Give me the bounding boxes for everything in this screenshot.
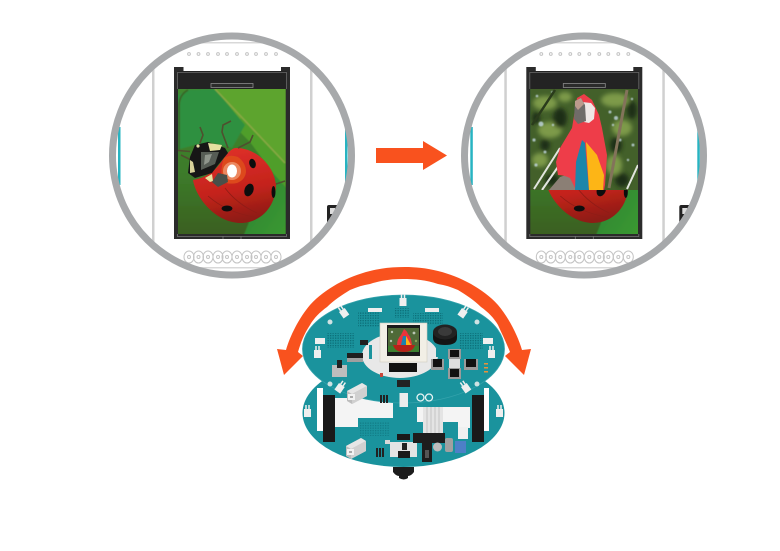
closeup: second display with parrot over ladybug: [461, 32, 707, 278]
circuit detail: [360, 422, 390, 436]
chips and parts: [347, 353, 363, 358]
arrow: transition between displays: [376, 141, 447, 170]
illustration canvas: [109, 32, 707, 480]
power switch and jack: [390, 442, 417, 457]
connectors: [400, 294, 406, 306]
magnifier ring: [112, 36, 352, 275]
rear caster: [393, 467, 414, 480]
arrow: curved rotation arrow: [277, 267, 531, 375]
closeup: first display with ladybug: [109, 32, 355, 278]
display bezel: [174, 67, 290, 239]
parrot image: [530, 89, 638, 190]
mini LCD showing parrot: [387, 325, 420, 356]
component pad grids: [327, 308, 483, 350]
robot: control board (upper): [302, 294, 504, 407]
push buttons: [431, 349, 478, 379]
robot: motor board (lower): [302, 359, 504, 480]
standoffs: [317, 388, 323, 431]
ribbon cables: [335, 398, 470, 428]
infinity logo: [417, 394, 432, 401]
LCD carrier: [362, 333, 438, 378]
magnifier ring: [464, 36, 704, 275]
ladybug image: [176, 87, 288, 237]
speaker: [433, 324, 457, 345]
